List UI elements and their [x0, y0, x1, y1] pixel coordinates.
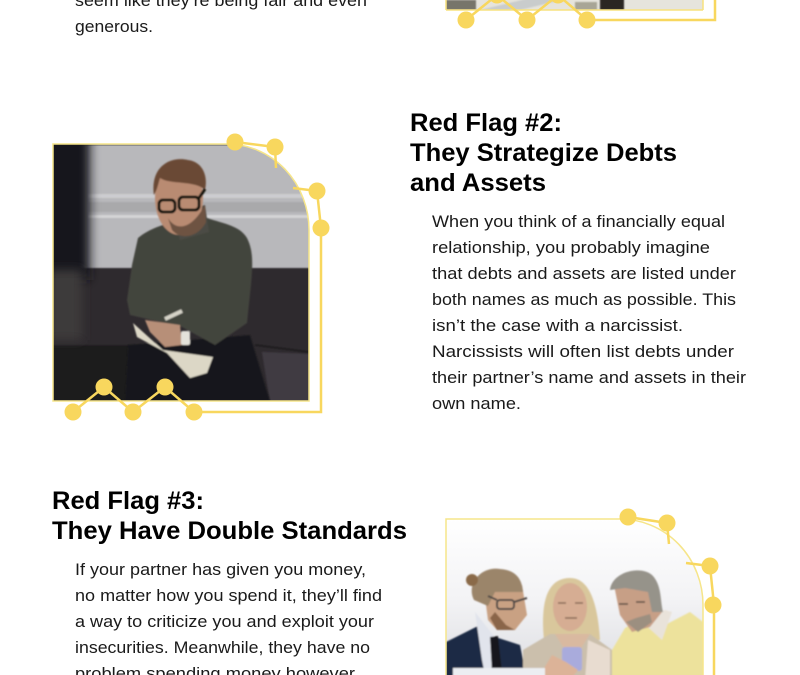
- text block: red flag 3: insecurities. Meanwhile, they have no: [75, 639, 370, 657]
- text block: red flag 2: isn’t the case with a narcissist.: [432, 317, 683, 335]
- frame: photo outline with connected dots: [53, 134, 330, 420]
- text block: red flag 3: [75, 561, 382, 675]
- heading: red flag 2: They Strategize Debts: [410, 139, 677, 167]
- text block: red flag 3: If your partner has given you money,: [75, 561, 366, 579]
- text block: red flag 2: own name.: [432, 395, 521, 413]
- heading: red flag 2: [410, 109, 677, 197]
- frame: photo outline with connected dots: [446, 508, 722, 675]
- heading: red flag 3: They Have Double Standards: [52, 517, 407, 545]
- heading: red flag 3: Red Flag #3:: [52, 487, 204, 515]
- text block: red flag 2: Narcissists will often list debts under: [432, 343, 735, 361]
- text block: red flag 2: both names as much as possible. This: [432, 291, 736, 309]
- photo and frame: red flag 1: [446, 0, 715, 28]
- heading: red flag 2: Red Flag #2:: [410, 109, 562, 137]
- text block: red flag 3: no matter how you spend it, they’ll find: [75, 587, 382, 605]
- text block: red flag 2: relationship, you probably imagine: [432, 239, 710, 257]
- text block: red flag 2: their partner’s name and assets in their: [432, 369, 747, 387]
- heading: red flag 3: [52, 487, 407, 545]
- text block: red flag 2: When you think of a financially equal: [432, 213, 725, 231]
- photo: man writing in a notebook: [54, 144, 308, 400]
- photo: three people looking at a phone: [446, 567, 702, 675]
- heading: red flag 2: and Assets: [410, 169, 546, 197]
- text block: end of red flag 1: generous.: [75, 18, 153, 36]
- text block: red flag 2: that debts and assets are listed under: [432, 265, 737, 283]
- text block: red flag 2: [432, 213, 747, 413]
- text block: red flag 3: a way to criticize you and exploit your: [75, 613, 375, 631]
- text block: end of red flag 1: [75, 0, 367, 36]
